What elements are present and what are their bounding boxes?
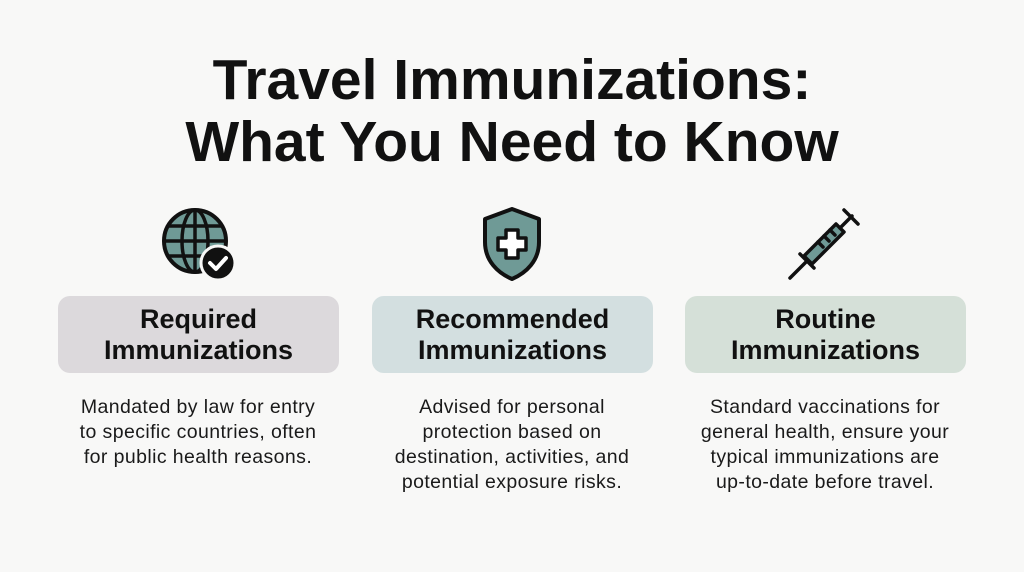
text: required [80,396,316,468]
text: recommended: Advised for personal [419,396,605,418]
title [185,48,839,174]
text: routine: up-to-date before travel. [716,471,934,493]
text: routine: typical immunizations are [711,446,939,468]
label: routine [685,296,966,373]
label: recommended [372,296,653,373]
text: routine [701,396,949,493]
label: required [58,296,339,373]
text: required: for public health reasons. [84,446,312,468]
icon: globe with check [162,208,234,278]
text: routine: Standard vaccinations for [710,396,940,418]
label: routine: Immunizations [731,334,920,364]
text: required: to specific countries, often [80,421,316,443]
text: recommended: protection based on [423,421,601,443]
text: recommended: potential exposure risks. [402,471,622,493]
title: What You Need to Know [185,110,839,174]
text: required: Mandated by law for entry [81,396,315,418]
text: routine: general health, ensure your [701,421,949,443]
label: recommended: Immunizations [418,334,607,364]
text: recommended [395,396,629,493]
label: required: Immunizations [104,334,293,364]
icon: shield with cross [483,207,541,281]
text: recommended: destination, activities, and [395,446,629,468]
label: routine: Routine [775,304,876,334]
title: Travel Immunizations: [213,48,811,112]
label: recommended: Recommended [416,304,609,334]
label: required: Required [140,304,257,334]
icon: syringe [788,208,860,280]
